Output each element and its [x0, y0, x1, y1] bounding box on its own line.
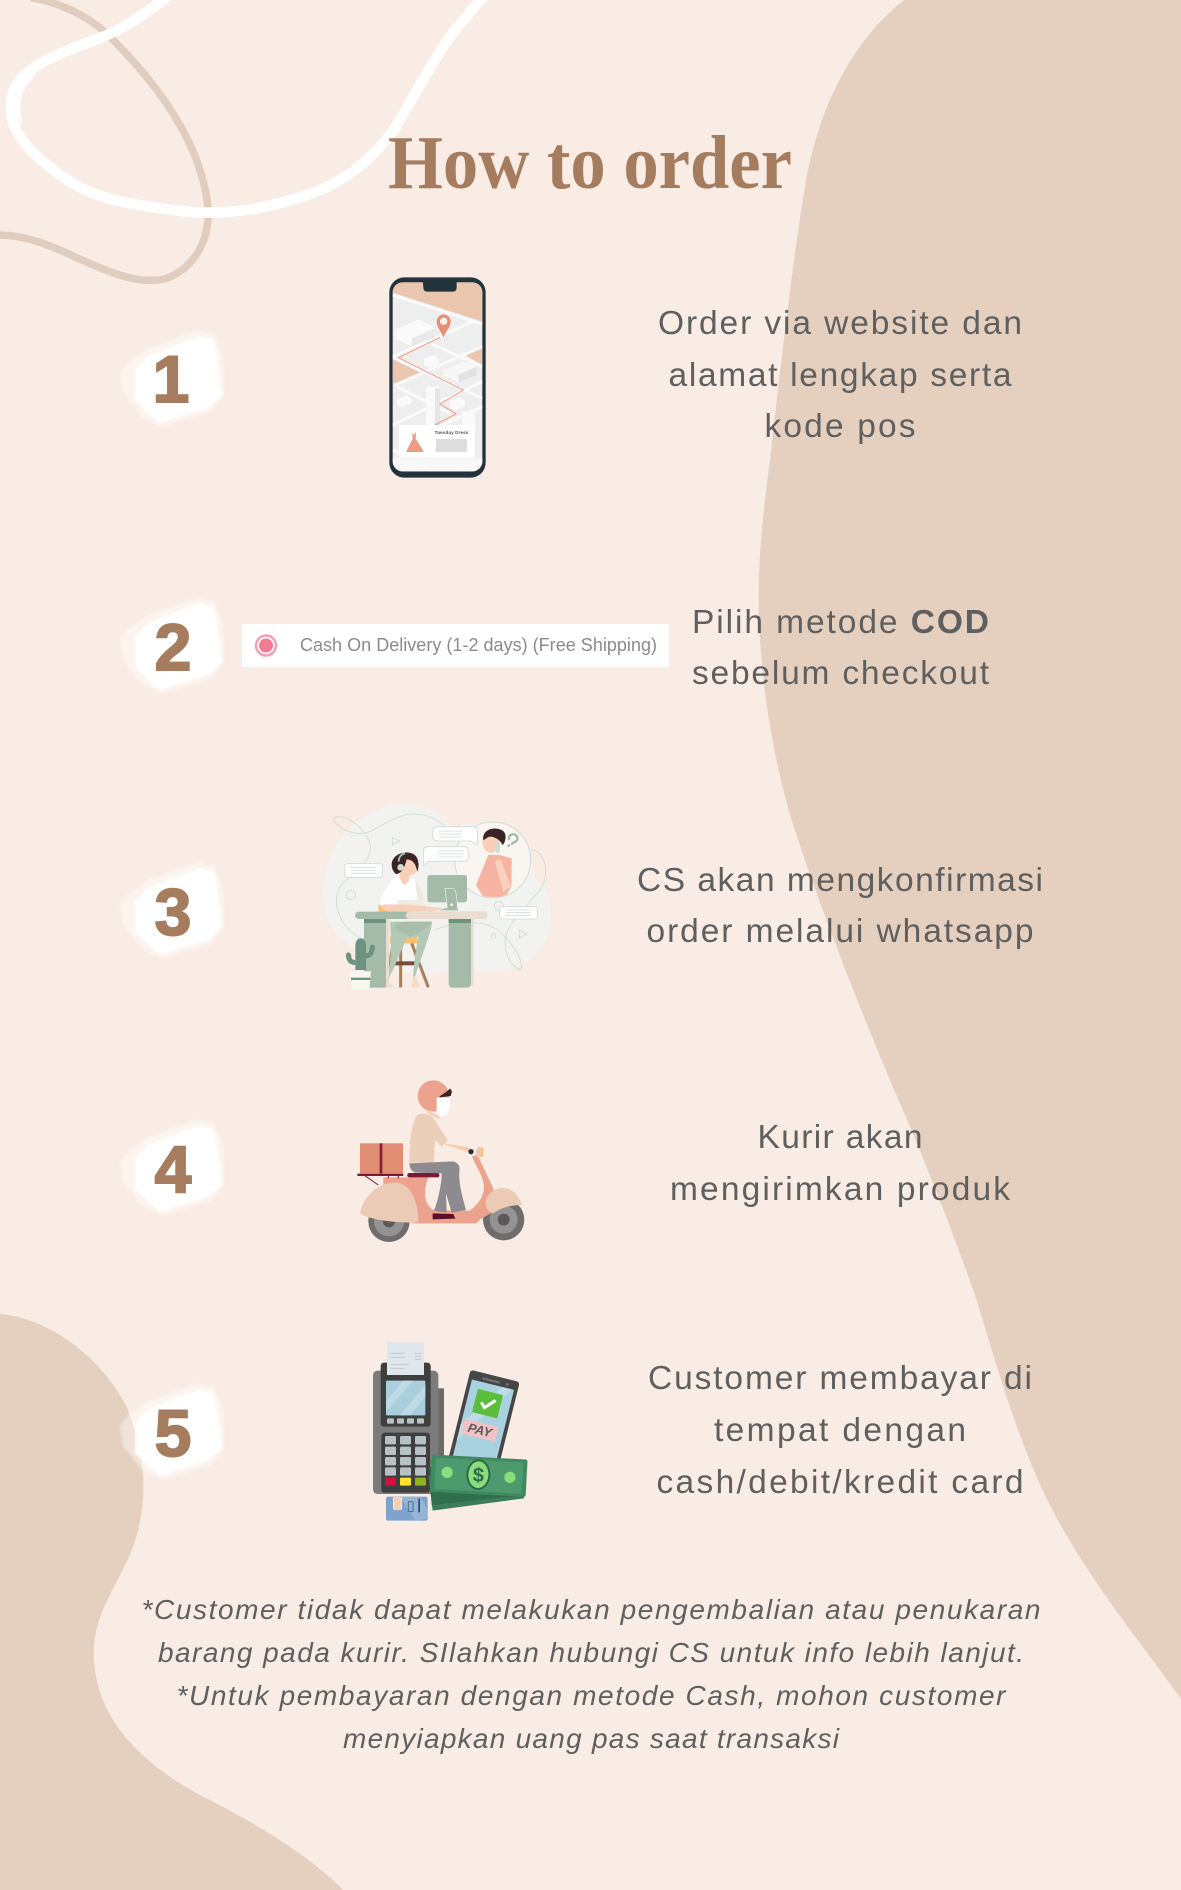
- step 1: [120, 277, 1022, 478]
- footnote: barang pada kurir. SIlahkan hubungi CS untuk info lebih lanjut.: [158, 1637, 1024, 1668]
- COD option card: Cash On Delivery (1-2 days) (Free Shipping): [300, 635, 657, 655]
- decorative line: white curve thick part: [13, 76, 26, 120]
- illustration: customer service: [323, 803, 551, 990]
- COD option card: [242, 624, 669, 667]
- icon: phone with map: [389, 277, 486, 478]
- step 4 description: [670, 1119, 1010, 1208]
- step 3 brush badge: [120, 862, 224, 959]
- background blob: bottom left: [0, 1314, 343, 1890]
- background blob: right: [759, 0, 1181, 1699]
- step 4 description: mengirimkan produk: [670, 1171, 1010, 1208]
- decorative line: tan curve: [0, 0, 208, 280]
- step 2 description: sebelum checkout: [692, 655, 990, 692]
- footnote: [142, 1594, 1040, 1754]
- illustration: courier on scooter: [357, 1080, 524, 1242]
- step 1 description: alamat lengkap serta: [668, 357, 1012, 394]
- icon: phone with map: Tuesday Dress: [435, 430, 469, 435]
- step 3: [120, 803, 1043, 990]
- step 1 description: [658, 305, 1022, 445]
- step 2 brush badge: [120, 597, 224, 694]
- step 4 brush badge: [120, 1119, 224, 1216]
- step 3 description: order melalui whatsapp: [646, 913, 1034, 950]
- title: How to order: [388, 121, 792, 205]
- step 1 number: 1: [153, 342, 189, 416]
- step 4: [120, 1080, 1010, 1242]
- step 5 description: tempat dengan: [714, 1412, 966, 1449]
- footnote: *Untuk pembayaran dengan metode Cash, mohon customer: [176, 1680, 1007, 1711]
- step 2 description: [692, 604, 990, 692]
- illustration: payment terminal, phone and cash: PAY: [466, 1421, 495, 1441]
- footnote: menyiapkan uang pas saat transaksi: [343, 1723, 840, 1754]
- step 2 description: Pilih metode COD: [692, 604, 989, 641]
- decorative line: white curve: [11, 0, 484, 213]
- footnote: *Customer tidak dapat melakukan pengembalian atau penukaran: [142, 1594, 1040, 1625]
- step 1 brush badge: [120, 330, 224, 427]
- step 5 description: cash/debit/kredit card: [656, 1464, 1024, 1501]
- step 3 description: CS akan mengkonfirmasi: [637, 862, 1043, 899]
- step 2 number: 2: [155, 610, 191, 684]
- illustration: payment terminal, phone and cash: [373, 1342, 528, 1521]
- step 3 description: [637, 862, 1043, 950]
- step 1 description: kode pos: [764, 408, 916, 445]
- step 5 description: [648, 1360, 1032, 1501]
- step 5 number: 5: [155, 1396, 191, 1470]
- step 5 brush badge: [120, 1383, 224, 1480]
- step 5 description: Customer membayar di: [648, 1360, 1032, 1397]
- step 5: [120, 1342, 1032, 1521]
- step 4 description: Kurir akan: [758, 1119, 922, 1156]
- step 4 number: 4: [155, 1132, 192, 1206]
- step 1 description: Order via website dan: [658, 305, 1022, 342]
- illustration: payment terminal, phone and cash: $: [472, 1464, 484, 1487]
- step 2: [120, 597, 990, 694]
- step 3 number: 3: [155, 875, 191, 949]
